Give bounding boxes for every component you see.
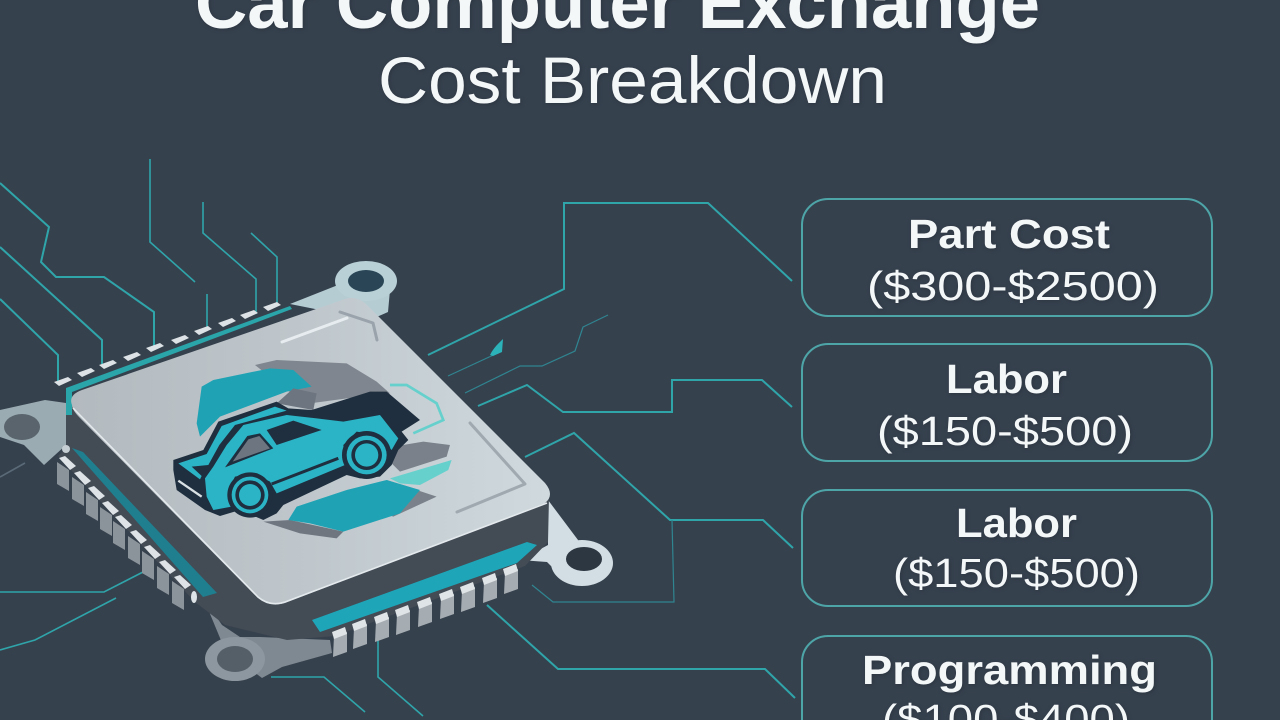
label: Labor [956, 500, 1077, 546]
car silhouette [173, 392, 420, 520]
teal patch: top-left [197, 368, 312, 437]
circuit traces [0, 159, 795, 716]
pins: top edge [54, 302, 281, 386]
car window [267, 421, 322, 445]
teal strip: left [72, 448, 217, 597]
connector: branch trace [532, 520, 674, 602]
mounting lug: left [0, 400, 66, 465]
emboss details [282, 312, 525, 512]
mounting lug: top [290, 261, 397, 320]
car bumper stripes [178, 481, 202, 497]
price range: ($150-$500) [893, 550, 1140, 596]
connector: labor second [525, 433, 793, 548]
short traces beside chip [448, 315, 608, 393]
light teal swoosh: lower right [390, 460, 452, 485]
gray patch: bottom [367, 480, 437, 517]
box outline [802, 199, 1212, 316]
car wheel rear [227, 472, 273, 518]
price range: ($300-$2500) [867, 263, 1159, 309]
panel: labor second [802, 490, 1212, 606]
teal strip: right [312, 542, 537, 632]
car body [205, 415, 398, 510]
face edge highlight [73, 408, 547, 604]
panel: part cost [802, 199, 1212, 316]
label: Programming [862, 647, 1157, 693]
panel: labor [802, 344, 1212, 461]
car roof strip [178, 407, 287, 479]
connector: programming [487, 605, 795, 698]
upper-left traces [0, 159, 277, 381]
chip illustration [0, 261, 613, 681]
teal edge: top [66, 306, 292, 415]
trace leaf accent [490, 339, 503, 356]
label: Labor [946, 356, 1067, 402]
box outline [802, 344, 1212, 461]
gray patch: under roof [277, 388, 317, 410]
chip top face [71, 298, 550, 605]
car wheel front [342, 431, 391, 479]
box outline [802, 636, 1212, 720]
pins: left edge [57, 445, 197, 610]
mounting lug: right [520, 500, 613, 586]
gray patch: top [255, 360, 390, 403]
panel: programming [802, 636, 1212, 720]
label: Part Cost [908, 211, 1110, 257]
connector: labor [478, 380, 792, 412]
icon: car emblem [173, 360, 452, 538]
light teal outline: upper right [390, 385, 443, 433]
gray patch: right [392, 442, 450, 472]
title [195, 0, 1040, 117]
car window rear [225, 433, 273, 467]
box outline [802, 490, 1212, 606]
teal patch: bottom [288, 480, 420, 532]
connector: part cost [428, 203, 792, 355]
lower-left traces [0, 463, 423, 716]
subtitle: Cost Breakdown: Cost Breakdown [378, 43, 887, 117]
price range: ($150-$500) [877, 408, 1133, 454]
car door stripe [272, 458, 338, 484]
mounting lug: bottom [203, 597, 332, 681]
pins: bottom-right edge [332, 564, 518, 657]
chip base and side walls [58, 400, 549, 640]
